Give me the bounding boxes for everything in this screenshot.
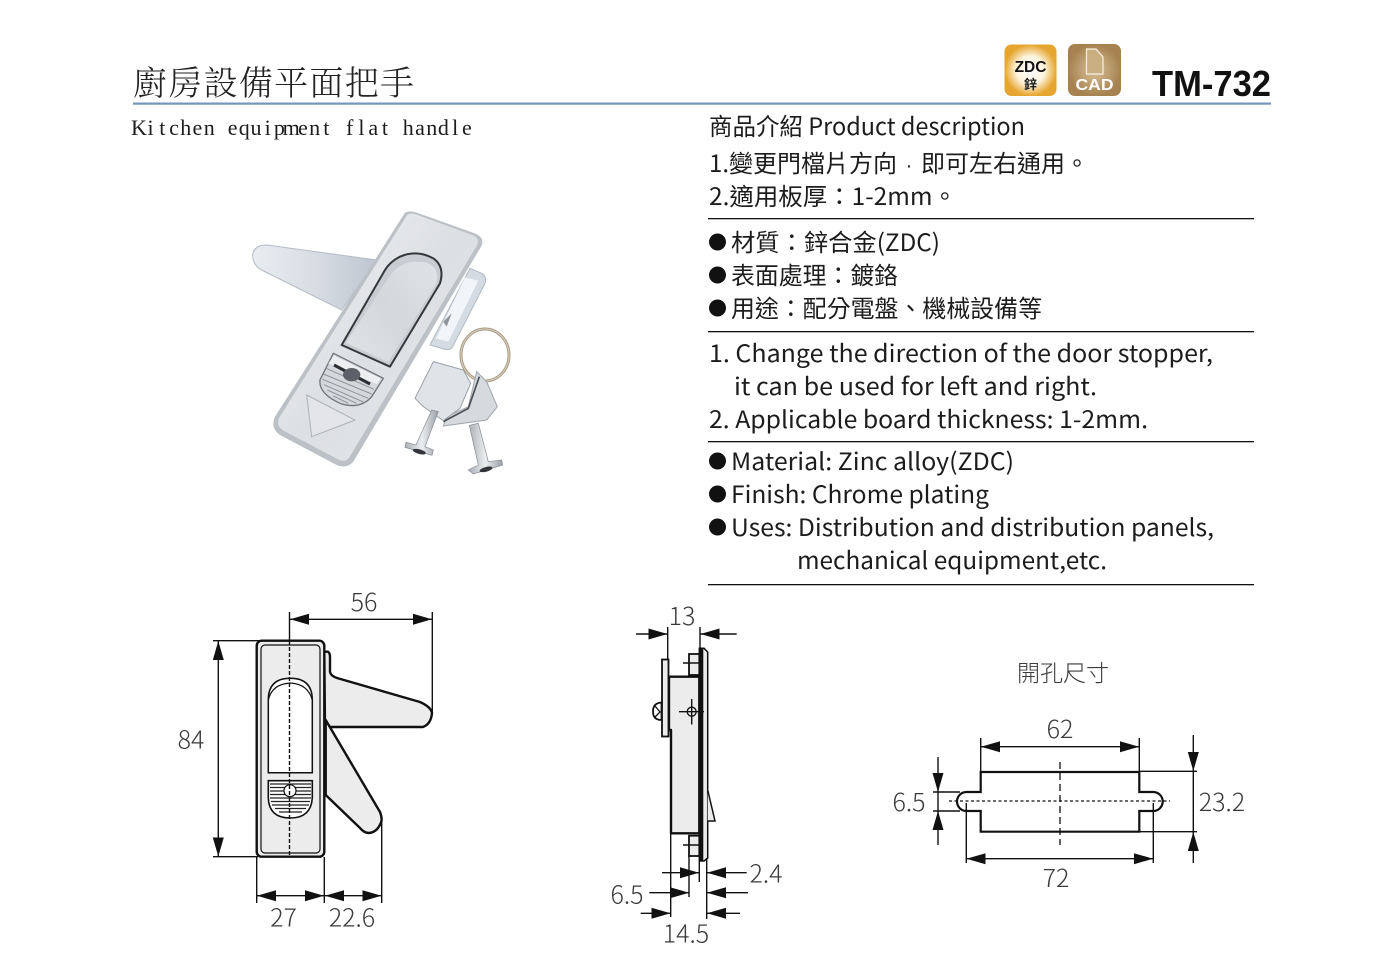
key ring: [461, 329, 509, 381]
divider: [708, 218, 1254, 219]
handle surface: [346, 262, 437, 362]
housing body: [669, 677, 699, 833]
dimension 6.5: 6.5: [610, 876, 644, 912]
centre mark: [679, 699, 704, 724]
dimension 14.5: [641, 833, 740, 950]
icon: ZDC zinc badge: [1004, 44, 1056, 96]
faceplate: [257, 641, 324, 857]
lower lever: [326, 720, 382, 833]
dimension 62: [981, 710, 1139, 772]
product description: English: 1. Change the direction of the door stopper,: [709, 334, 1213, 369]
lock cover: [268, 781, 312, 818]
feature 1: [709, 144, 1089, 179]
dimension 6.5: 6.5: [892, 783, 926, 819]
product description: English: 2. Applicable board thickness: 1-2mm.: [709, 400, 1148, 435]
icon: ZDC zinc badge: ZDC: [1015, 59, 1046, 76]
dimension 62: 62: [1047, 710, 1073, 746]
icon: CAD file badge: CAD: [1076, 77, 1114, 94]
dimension 27: 27: [270, 898, 297, 934]
lock cover: [320, 353, 383, 406]
model number: TM-732: [1152, 63, 1271, 104]
embossed triangle: [307, 395, 355, 437]
title: Chinese product name: 廚房設備平面把手: [133, 56, 414, 105]
rear key: [443, 372, 503, 474]
specifications: English: Finish: Chrome plating: [731, 475, 989, 510]
cutout heading: 開孔尺寸: [1017, 654, 1109, 688]
specifications: English: Material: Zinc alloy(ZDC): [731, 442, 1014, 477]
side view dimension drawing: [610, 597, 783, 950]
feature 2: 2.適用板厚：1-2mm。: [709, 177, 957, 212]
subtitle: English product name: Kitchen equipment flat handle: [131, 115, 472, 140]
dimension 14.5: 14.5: [663, 914, 709, 950]
specifications: Chinese: [709, 223, 1042, 324]
handle recess: [268, 678, 312, 773]
handle recess: [342, 253, 441, 367]
cutout outline: [957, 772, 1163, 832]
dimension 6.5: [892, 757, 960, 845]
divider: [708, 441, 1254, 442]
specifications: English: mechanical equipment,etc.: [797, 541, 1107, 576]
screw: [653, 702, 662, 720]
icon: ZDC zinc badge: 鋅: [1024, 74, 1037, 93]
nuts: [689, 654, 699, 675]
dimension 13: 13: [669, 597, 695, 633]
feature 1: 1.變更門檔片方向: [709, 144, 897, 179]
front key: [405, 362, 471, 456]
product description: English: it can be used for left and right.: [734, 367, 1097, 402]
dimension 2.4: 2.4: [749, 854, 783, 890]
dimension 23.2: 23.2: [1199, 783, 1245, 819]
dimension 72: 72: [1043, 859, 1069, 895]
dimension 23.2: [1140, 735, 1245, 863]
face plate: [699, 648, 708, 861]
feature 1: 即可左右通用。: [921, 144, 1089, 179]
specifications: English: [709, 442, 1214, 576]
specifications: Chinese: 材質：鋅合金(ZDC): [731, 223, 940, 258]
specifications: Chinese: 用途：配分電盤、機械設備等: [731, 289, 1042, 324]
cutout dimension drawing: [892, 654, 1245, 895]
centre lines: [949, 800, 1170, 802]
rear housing: [430, 268, 486, 350]
upper lever: [324, 652, 432, 727]
front view dimension drawing: [178, 583, 432, 934]
dimension 84: [178, 641, 290, 857]
lever arm: [253, 245, 377, 310]
mounting flange: [662, 660, 668, 736]
dimension 84: 84: [178, 720, 204, 756]
dimension 22.6: 22.6: [329, 898, 375, 934]
description heading: 商品介紹 Product description: [709, 107, 1025, 142]
main plate: [273, 211, 509, 474]
product description: Chinese: [709, 107, 1089, 212]
centre line: [288, 612, 290, 640]
product photo: latch with keys: [253, 211, 509, 474]
feature 1: ·: [906, 155, 912, 177]
product description: English: [709, 334, 1213, 435]
dimension 72: [966, 803, 1153, 895]
dimension 6.5: [610, 856, 748, 912]
icon: CAD file badge: [1068, 44, 1121, 96]
lever tip: [708, 790, 715, 821]
dimension 27: [257, 857, 324, 934]
specifications: English: Uses: Distribution and distribution panels,: [731, 508, 1214, 543]
dimension 13: [636, 597, 737, 659]
dimension 22.6: [325, 820, 382, 934]
divider: [708, 584, 1254, 585]
dimension 56: 56: [351, 583, 377, 619]
header rule: [133, 102, 1271, 105]
divider: [708, 331, 1254, 332]
dimension 2.4: [662, 854, 783, 890]
specifications: Chinese: 表面處理：鍍鉻: [731, 256, 898, 291]
